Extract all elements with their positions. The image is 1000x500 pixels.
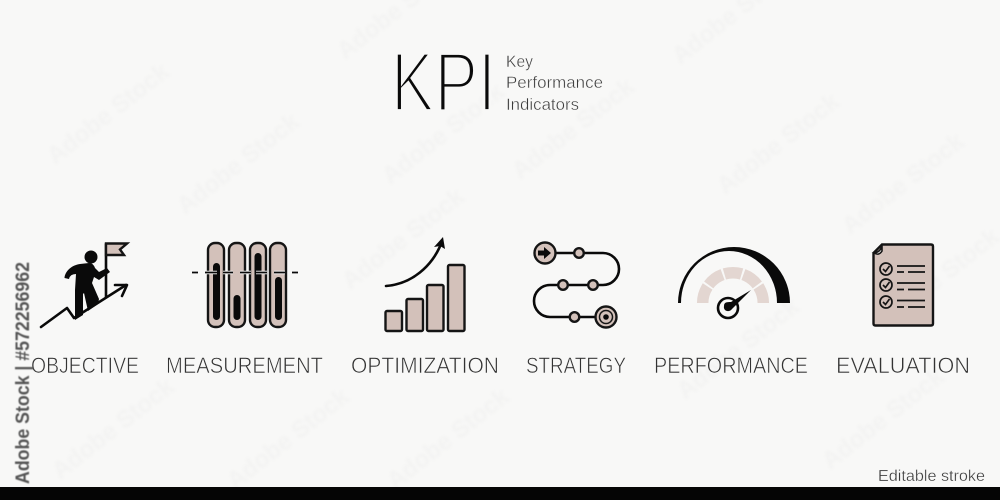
label: MEASUREMENT: MEASUREMENT — [166, 353, 323, 378]
subtitle: Key Performance Indicators: Indicators — [506, 95, 579, 114]
text: Adobe Stock — [47, 373, 180, 485]
subtitle: Key Performance Indicators — [506, 52, 603, 114]
text: Adobe Stock — [712, 88, 845, 200]
icon: strategy path — [534, 242, 619, 328]
icon: measurement sliders — [192, 243, 298, 327]
icon: evaluation checklist — [874, 244, 933, 326]
text: Adobe Stock — [377, 78, 510, 190]
note: editable stroke: Editable stroke — [878, 468, 985, 485]
icon: optimization bar chart with arrow — [386, 237, 464, 331]
label: OBJECTIVE: OBJECTIVE — [31, 353, 139, 378]
subtitle: Key Performance Indicators: Performance — [506, 73, 603, 92]
text: Adobe Stock — [337, 183, 470, 295]
subtitle: Key Performance Indicators: Key — [506, 52, 533, 71]
label: EVALUATION: EVALUATION — [836, 353, 970, 378]
text: Adobe Stock — [507, 73, 640, 185]
title: KPI: KPI — [391, 35, 496, 129]
text: Adobe Stock — [837, 128, 970, 240]
text: Adobe Stock — [222, 383, 355, 495]
footer black bar — [0, 487, 1000, 500]
side credit: Adobe Stock id: Adobe Stock | #572256962 — [13, 262, 34, 484]
text: Adobe Stock — [172, 108, 305, 220]
label: OPTIMIZATION: OPTIMIZATION — [351, 353, 499, 378]
text: Adobe Stock — [817, 363, 950, 475]
icon: performance gauge — [678, 247, 790, 318]
icon: objective climber with flag — [41, 244, 127, 327]
label: PERFORMANCE: PERFORMANCE — [654, 353, 808, 378]
label: STRATEGY: STRATEGY — [526, 353, 626, 378]
text: Adobe Stock — [672, 293, 805, 405]
text: Adobe Stock — [382, 383, 515, 495]
text: Adobe Stock — [42, 58, 175, 170]
